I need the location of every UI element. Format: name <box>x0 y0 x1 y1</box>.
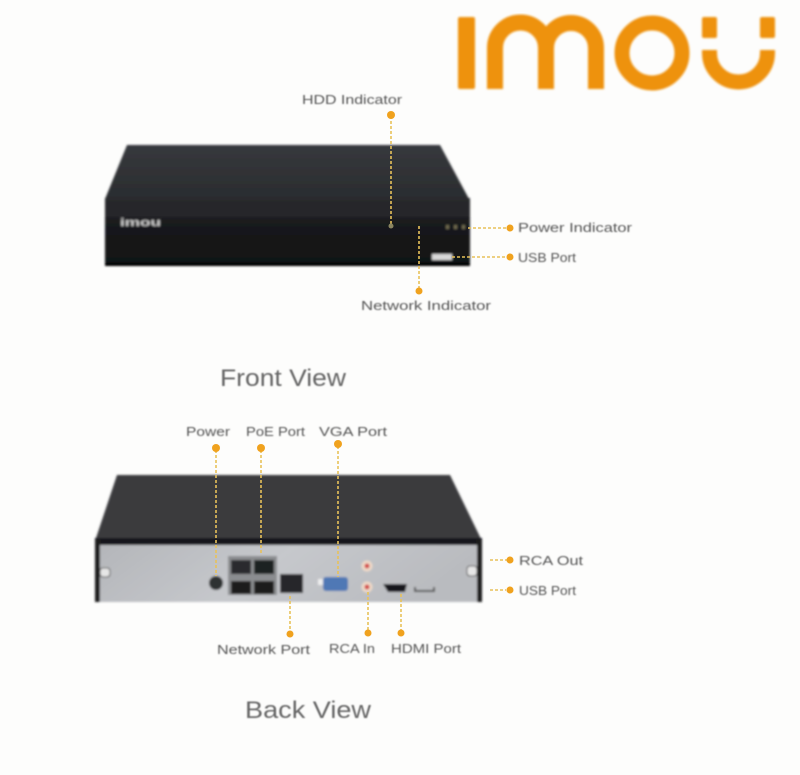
front view device <box>105 145 470 266</box>
screw tabs <box>100 566 477 577</box>
callout: USB Port front: USB Port <box>518 250 576 265</box>
RCA sockets <box>363 562 371 591</box>
callout: Network Indicator: Network Indicator <box>361 298 492 313</box>
back view device <box>95 475 482 602</box>
USB slot <box>432 254 452 260</box>
callout: RCA Out: RCA Out <box>519 553 583 568</box>
callout: PoE Port <box>246 424 305 555</box>
callout: Power Indicator <box>468 220 633 235</box>
network port <box>280 574 303 593</box>
front device logo: imou <box>120 217 161 229</box>
USB port back <box>415 587 434 591</box>
callout: USB Port back <box>490 583 576 598</box>
callout: VGA Port: VGA Port <box>319 424 387 439</box>
callout: RCA In: RCA In <box>329 641 375 656</box>
callout: Network Port <box>217 596 310 657</box>
callout: Power <box>186 424 231 576</box>
VGA port <box>318 577 348 591</box>
callout: Network Indicator <box>361 226 492 313</box>
callout: HDD Indicator <box>302 92 403 228</box>
callout: Power: Power <box>186 424 231 439</box>
callout: HDMI Port <box>391 594 461 656</box>
indicator lights <box>446 225 465 229</box>
PoE ports <box>228 556 277 595</box>
heading: Front View: Front View <box>220 365 347 392</box>
power socket <box>209 576 223 590</box>
imou logo <box>458 17 775 89</box>
callout: HDD Indicator: HDD Indicator <box>302 92 403 107</box>
callout: USB Port back: USB Port <box>519 583 576 598</box>
callout: HDMI Port: HDMI Port <box>391 641 461 656</box>
callout: RCA In <box>329 592 375 656</box>
callout: Network Port: Network Port <box>217 642 310 657</box>
callout: Power Indicator: Power Indicator <box>518 220 633 235</box>
callout: PoE Port: PoE Port <box>246 424 305 439</box>
HDMI port <box>383 584 407 592</box>
callout: VGA Port <box>319 424 387 577</box>
callout: USB Port front <box>452 250 576 265</box>
heading: Back View: Back View <box>245 697 372 724</box>
callout: RCA Out <box>490 553 583 568</box>
